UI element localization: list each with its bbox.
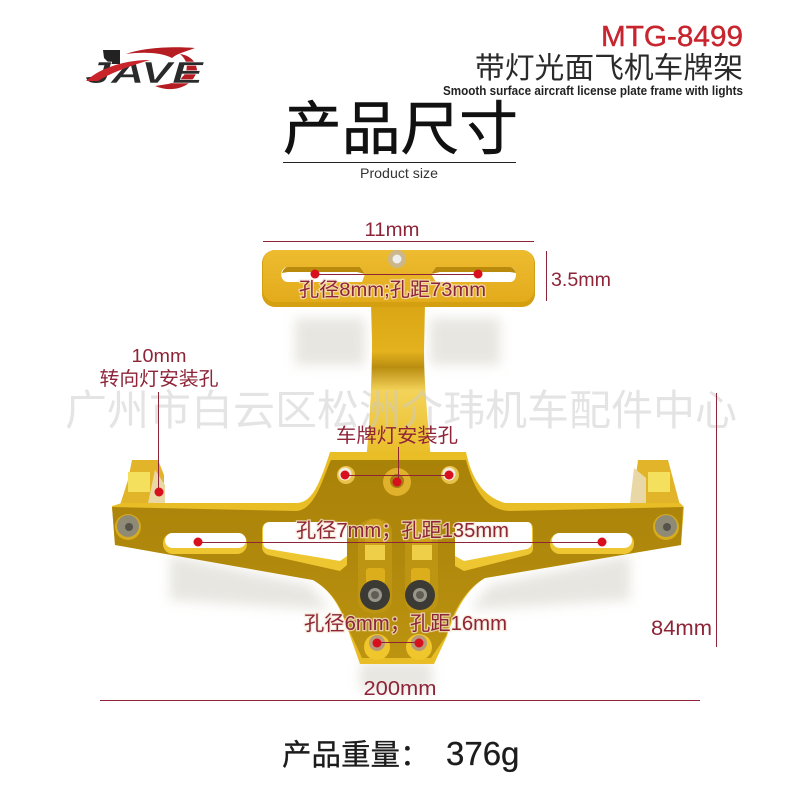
- title: 产品尺寸: [283, 97, 518, 162]
- callout: side slots: [194, 519, 606, 546]
- subtitle: Product size: [360, 165, 438, 181]
- product weight: 376g: [446, 735, 519, 772]
- dimension: height 3.5mm: 3.5mm: [551, 270, 611, 291]
- product: license plate bracket: [112, 250, 684, 664]
- product name in English: Smooth surface aircraft license plate frame with lights: [443, 84, 743, 98]
- ear right: [632, 460, 680, 505]
- callout: upper holes: [299, 270, 486, 301]
- window left: [262, 522, 347, 571]
- plate bevel: [112, 452, 684, 664]
- logo: JAVE: JAVE: [85, 55, 205, 90]
- bolts: [115, 514, 679, 610]
- product name: 带灯光面飞机车牌架: [475, 52, 743, 85]
- long slot left: [163, 533, 247, 554]
- upper bar: [262, 250, 535, 307]
- long slot right: [550, 533, 634, 554]
- callout: turn signal hole: [100, 346, 218, 496]
- window right: [455, 522, 533, 571]
- callout: plate light holes: 车牌灯安装孔: [336, 425, 458, 447]
- dimension: width 200mm: 200mm: [364, 678, 436, 700]
- callout: upper holes: 孔径8mm;孔距73mm: [299, 279, 486, 301]
- callout: lower holes: 孔径6mm；孔距16mm: [304, 612, 507, 635]
- product weight: 产品重量：: [282, 739, 430, 772]
- dimension: width 11mm: 11mm: [364, 220, 420, 241]
- dimension: height 3.5mm: [546, 251, 611, 301]
- small holes: [337, 466, 459, 660]
- callout: plate light holes: [336, 425, 458, 486]
- dimension: height 84mm: 84mm: [651, 617, 712, 640]
- product shadows: [170, 318, 630, 690]
- callout: turn signal hole: 10mm: [132, 346, 186, 366]
- model number: MTG-8499: [601, 21, 743, 53]
- centre channels: [358, 518, 392, 614]
- logo: JAVE: [85, 47, 205, 90]
- plate face: [112, 460, 683, 658]
- callout: lower holes: [304, 612, 507, 648]
- callout: side slots: 孔径7mm；孔距135mm: [296, 519, 509, 542]
- ear left: [120, 460, 164, 505]
- callout: turn signal hole: 转向灯安装孔: [100, 368, 218, 390]
- watermark: 广州市白云区松洲介玮机车配件中心: [65, 387, 737, 434]
- stem: [366, 304, 431, 462]
